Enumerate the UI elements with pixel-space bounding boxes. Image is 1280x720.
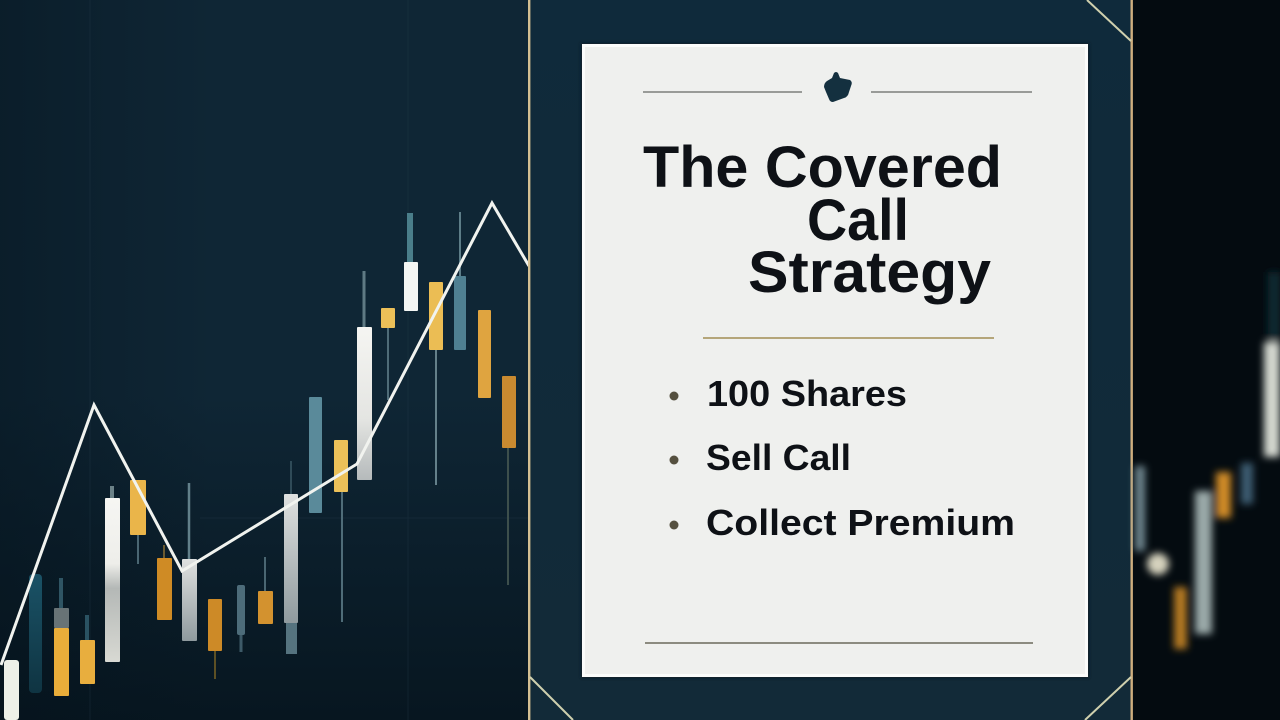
title: Call: [807, 188, 909, 253]
candle 1: [4, 660, 19, 720]
title: Strategy: [748, 240, 991, 305]
white card: [581, 43, 1089, 678]
candle 16: [381, 308, 395, 328]
candle 12: [284, 494, 298, 654]
candle 11: [258, 591, 273, 624]
top ornament: rules and star: [643, 72, 1032, 102]
title: [643, 135, 1002, 305]
price line: [1, 203, 529, 665]
bullet: Sell Call: Sell Call: [706, 437, 851, 478]
corner accent: bottom right: [1085, 677, 1131, 720]
right dark area with blurred candles: [1133, 0, 1280, 720]
gold divider: [703, 337, 994, 339]
bullet: Collect Premium: Collect Premium: [706, 502, 1015, 543]
corner accent: top right: [1087, 0, 1131, 41]
candle 15: [357, 327, 372, 480]
candle 20: [478, 310, 491, 398]
corner accent: bottom left: [530, 677, 573, 720]
candle 9: [208, 599, 222, 651]
candle 21: [502, 376, 516, 448]
candlestick chart: [4, 212, 516, 720]
candle 3: [54, 608, 69, 696]
bottom rule: [645, 642, 1033, 644]
wicks: [61, 212, 508, 679]
background: left chart area: [0, 0, 530, 720]
candle 4: [80, 640, 95, 684]
center panel with gold frame: [528, 0, 1133, 720]
bullet: 100 Shares: 100 Shares: [707, 373, 907, 414]
candle 7: [157, 558, 172, 620]
candle 8: [182, 559, 197, 641]
candle 6: [130, 480, 146, 535]
candle 19: [454, 276, 466, 350]
candle 10: [237, 585, 245, 635]
bullet list: [670, 373, 1015, 543]
title: The Covered: [643, 135, 1002, 200]
candle 13: [309, 397, 322, 513]
candle 14: [334, 440, 348, 492]
candle 2: [29, 574, 42, 693]
icon: star ornament: [824, 72, 852, 102]
candle 17: [404, 262, 418, 311]
candle 5: [105, 498, 120, 662]
candle 18: [429, 282, 443, 350]
